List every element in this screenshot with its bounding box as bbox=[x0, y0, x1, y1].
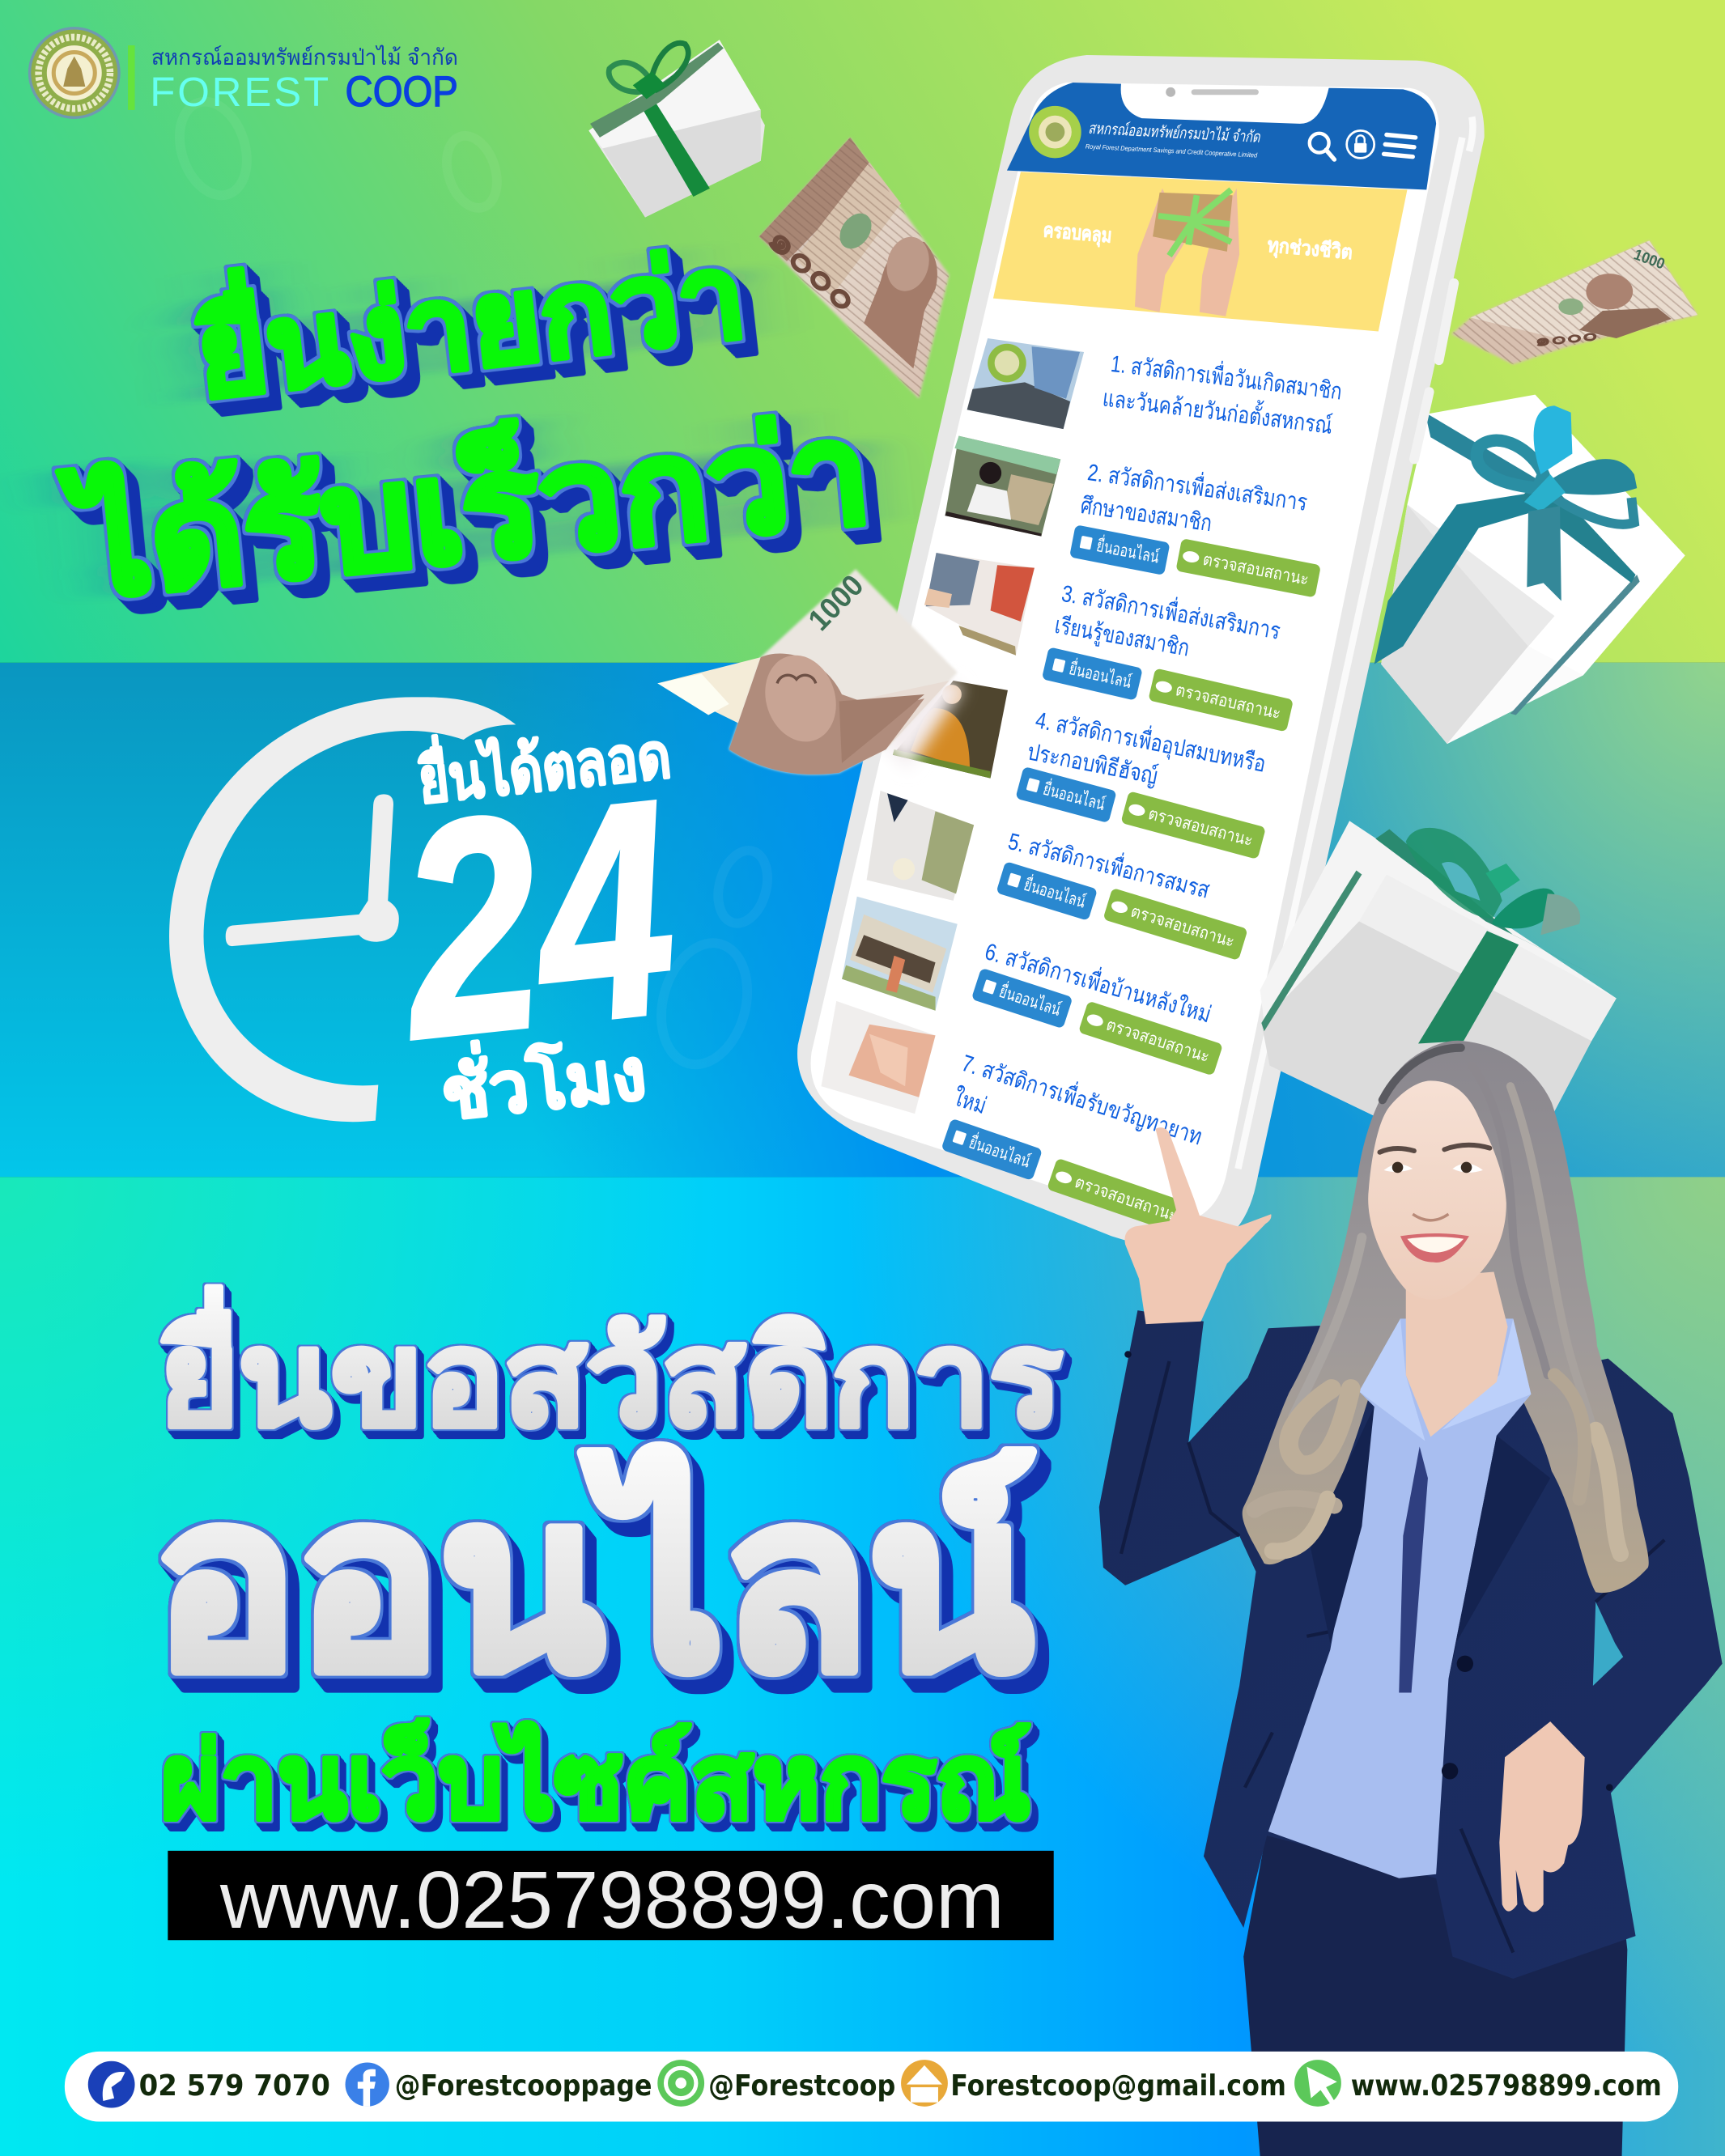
banknote: upper right: ๑๐๐๐ bbox=[1534, 326, 1599, 350]
button: apply online 3 bbox=[1042, 647, 1143, 701]
gift box: top green bbox=[588, 40, 765, 217]
bottom headline: request welfare: ยื่นขอสวัสดิการ bbox=[159, 1286, 1062, 1453]
clock caption: hours: ชั่วโมง bbox=[436, 1023, 650, 1135]
woman presenter bbox=[1099, 1041, 1723, 2156]
background: middle blue band bbox=[0, 663, 1725, 1177]
bezel highlights bbox=[1238, 117, 1472, 1169]
background: top green band bbox=[0, 0, 1725, 663]
button: check status 7: ตรวจสอบสถานะ bbox=[1073, 1173, 1180, 1225]
site header: Royal Forest Department Savings and Credit Cooperative Limited bbox=[1086, 143, 1258, 159]
button: check status 3: ตรวจสอบสถานะ bbox=[1174, 681, 1282, 723]
shirt placket bbox=[1399, 1446, 1428, 1692]
button: check status 6 bbox=[1078, 1001, 1223, 1076]
jacket buttons bbox=[1124, 1351, 1613, 1791]
thumbnail 5 bbox=[867, 791, 974, 901]
background: bottom cyan band bbox=[0, 1177, 1725, 2156]
item 4 bbox=[1015, 703, 1268, 859]
logo: สหกรณ์ออมทรัพย์กรมป่าไม้ จำกัด bbox=[151, 45, 458, 70]
item 7: 7. สวัสดิการเพื่อรับขวัญทายาท bbox=[958, 1046, 1206, 1150]
icon: cursor bbox=[1294, 2060, 1341, 2107]
banknote: upper left of phone bbox=[759, 138, 950, 399]
headline line 1 motion streak: ยื่นง่ายกว่า bbox=[188, 212, 752, 422]
gap under right arm bbox=[1593, 1602, 1623, 1686]
lapels bbox=[1310, 1407, 1550, 1679]
thumbnail 6 bbox=[842, 897, 958, 1011]
eyes and brows bbox=[1379, 1145, 1489, 1173]
headline line 2 motion streak: ได้รับเร็วกว่า bbox=[57, 387, 877, 629]
button: check status 3 bbox=[1148, 668, 1294, 732]
icon: home bbox=[901, 2060, 948, 2107]
button: apply online 4 bbox=[1015, 766, 1117, 823]
item 4: ประกอบพิธีฮัจญ์ bbox=[1025, 738, 1160, 790]
item 2: 2. สวัสดิการเพื่อส่งเสริมการ bbox=[1086, 456, 1310, 516]
back hair bbox=[1243, 1041, 1649, 1593]
neck and chest bbox=[1406, 1272, 1508, 1437]
side buttons bbox=[1414, 283, 1454, 459]
banknote: upper right: 1000 bbox=[1632, 245, 1668, 273]
headline: receive faster: ได้รับเร็วกว่า bbox=[57, 387, 877, 629]
logo: COOP bbox=[346, 68, 458, 116]
site header: สหกรณ์ออมทรัพย์กรมป่าไม้ จำกัด bbox=[1088, 119, 1261, 146]
icon: at sign bbox=[657, 2060, 704, 2107]
collar bbox=[1359, 1318, 1531, 1441]
item 7 bbox=[941, 1046, 1206, 1235]
item 5: 5. สวัสดิการเพื่อการสมรส bbox=[1005, 825, 1213, 904]
thumbnail 7 bbox=[822, 1001, 936, 1114]
item 2 bbox=[1069, 456, 1321, 598]
item 2: ศึกษาของสมาชิก bbox=[1079, 493, 1213, 537]
item 1 bbox=[1101, 347, 1344, 439]
button: check status 4 bbox=[1120, 791, 1266, 859]
item 1: และวันคล้ายวันก่อตั้งสหกรณ์ bbox=[1101, 380, 1334, 439]
banknote: flying over phone bbox=[657, 568, 963, 775]
item 7: ใหม่ bbox=[950, 1084, 990, 1119]
skirt bbox=[1243, 1788, 1627, 2156]
jacket shading bbox=[1121, 1361, 1664, 1953]
shirt bbox=[1268, 1318, 1531, 1878]
thumbnail 2 bbox=[945, 436, 1060, 537]
button: check status 5 bbox=[1103, 888, 1248, 961]
yellow banner bbox=[993, 172, 1407, 331]
button: apply online 5: ยื่นออนไลน์ bbox=[1022, 872, 1089, 912]
logo bbox=[28, 27, 458, 119]
hair curls bbox=[1255, 1375, 1621, 1554]
bottom headline: online: ออนไลน์ bbox=[154, 1445, 1035, 1718]
button: apply online 5 bbox=[996, 861, 1098, 921]
item 3 bbox=[1042, 577, 1294, 732]
banknote: upper right bbox=[1451, 240, 1697, 364]
clock icon bbox=[169, 697, 516, 1122]
banknote: flying over phone: 1000 bbox=[801, 568, 870, 637]
phone body bbox=[797, 55, 1485, 1258]
yellow banner: ครอบคลุม bbox=[1042, 219, 1113, 249]
line handle: @Forestcoop bbox=[708, 2069, 895, 2103]
smartphone bbox=[797, 55, 1485, 1258]
banknote: upper left of phone: ๑๐๐๐ bbox=[759, 217, 867, 320]
email: Forestcoop@gmail.com bbox=[950, 2069, 1286, 2103]
button: apply online 6 bbox=[971, 968, 1073, 1029]
smile bbox=[1400, 1233, 1469, 1263]
button: apply online 7: ยื่นออนไลน์ bbox=[967, 1131, 1034, 1172]
clock caption: any time: ยื่นได้ตลอด bbox=[414, 711, 674, 817]
jacket bbox=[1099, 1310, 1723, 1979]
item 6 bbox=[971, 935, 1223, 1076]
icon: facebook bbox=[346, 2062, 389, 2107]
site header bbox=[1007, 83, 1436, 189]
faint coin watermarks bbox=[168, 93, 775, 1074]
face bbox=[1368, 1080, 1506, 1300]
button: apply online 2: ยื่นออนไลน์ bbox=[1095, 533, 1162, 567]
button: check status 6: ตรวจสอบสถานะ bbox=[1104, 1016, 1212, 1067]
contact bar bbox=[65, 2052, 1678, 2122]
headline: file easier: ยื่นง่ายกว่า bbox=[188, 212, 752, 422]
item 3: เรียนรู้ของสมาชิก bbox=[1052, 613, 1192, 663]
button: check status 2 bbox=[1175, 538, 1321, 598]
nose bbox=[1413, 1214, 1448, 1220]
thumbnail 1 bbox=[967, 338, 1084, 429]
hand on hip bbox=[1499, 1721, 1585, 1912]
thumbnail 3 bbox=[924, 553, 1035, 656]
button: apply online 2 bbox=[1069, 524, 1171, 575]
clock number 24: 24 bbox=[383, 736, 689, 1103]
gift box: lower green bbox=[1260, 821, 1617, 1117]
phone number: 02 579 7070 bbox=[139, 2069, 330, 2103]
icon: phone bbox=[88, 2061, 135, 2108]
raised hand bbox=[1124, 1127, 1271, 1324]
item 1: 1. สวัสดิการเพื่อวันเกิดสมาชิก bbox=[1110, 347, 1344, 405]
website address box: www.025798899.com bbox=[219, 1855, 1005, 1946]
button: check status 2: ตรวจสอบสถานะ bbox=[1201, 550, 1311, 589]
yellow banner: ทุกช่วงชีวิต bbox=[1266, 234, 1353, 265]
thumbnail 4 bbox=[893, 681, 1008, 779]
website: www.025798899.com bbox=[1351, 2069, 1662, 2103]
facebook handle: @Forestcooppage bbox=[395, 2069, 652, 2103]
phone screen bbox=[811, 83, 1439, 1224]
button: check status 5: ตรวจสอบสถานะ bbox=[1128, 902, 1237, 951]
button: check status 4: ตรวจสอบสถานะ bbox=[1146, 804, 1255, 851]
button: apply online 3: ยื่นออนไลน์ bbox=[1067, 656, 1134, 692]
bottom headline: via coop website: ผ่านเว็บไซค์สหกรณ์ bbox=[161, 1719, 1030, 1840]
item 6: 6. สวัสดิการเพื่อบ้านหลังใหม่ bbox=[982, 935, 1215, 1029]
item 5 bbox=[996, 825, 1248, 961]
item 4: 4. สวัสดิการเพื่ออุปสมบทหรือ bbox=[1033, 703, 1268, 779]
item 3: 3. สวัสดิการเพื่อส่งเสริมการ bbox=[1060, 577, 1283, 645]
logo: FOREST bbox=[150, 69, 329, 115]
button: apply online 6: ยื่นออนไลน์ bbox=[997, 979, 1064, 1020]
button: check status 7 bbox=[1047, 1158, 1192, 1235]
gift box: right teal bbox=[1374, 395, 1685, 744]
hair strands bbox=[1293, 1048, 1617, 1540]
button: apply online 7 bbox=[941, 1118, 1043, 1181]
button: apply online 4: ยื่นออนไลน์ bbox=[1041, 777, 1108, 814]
